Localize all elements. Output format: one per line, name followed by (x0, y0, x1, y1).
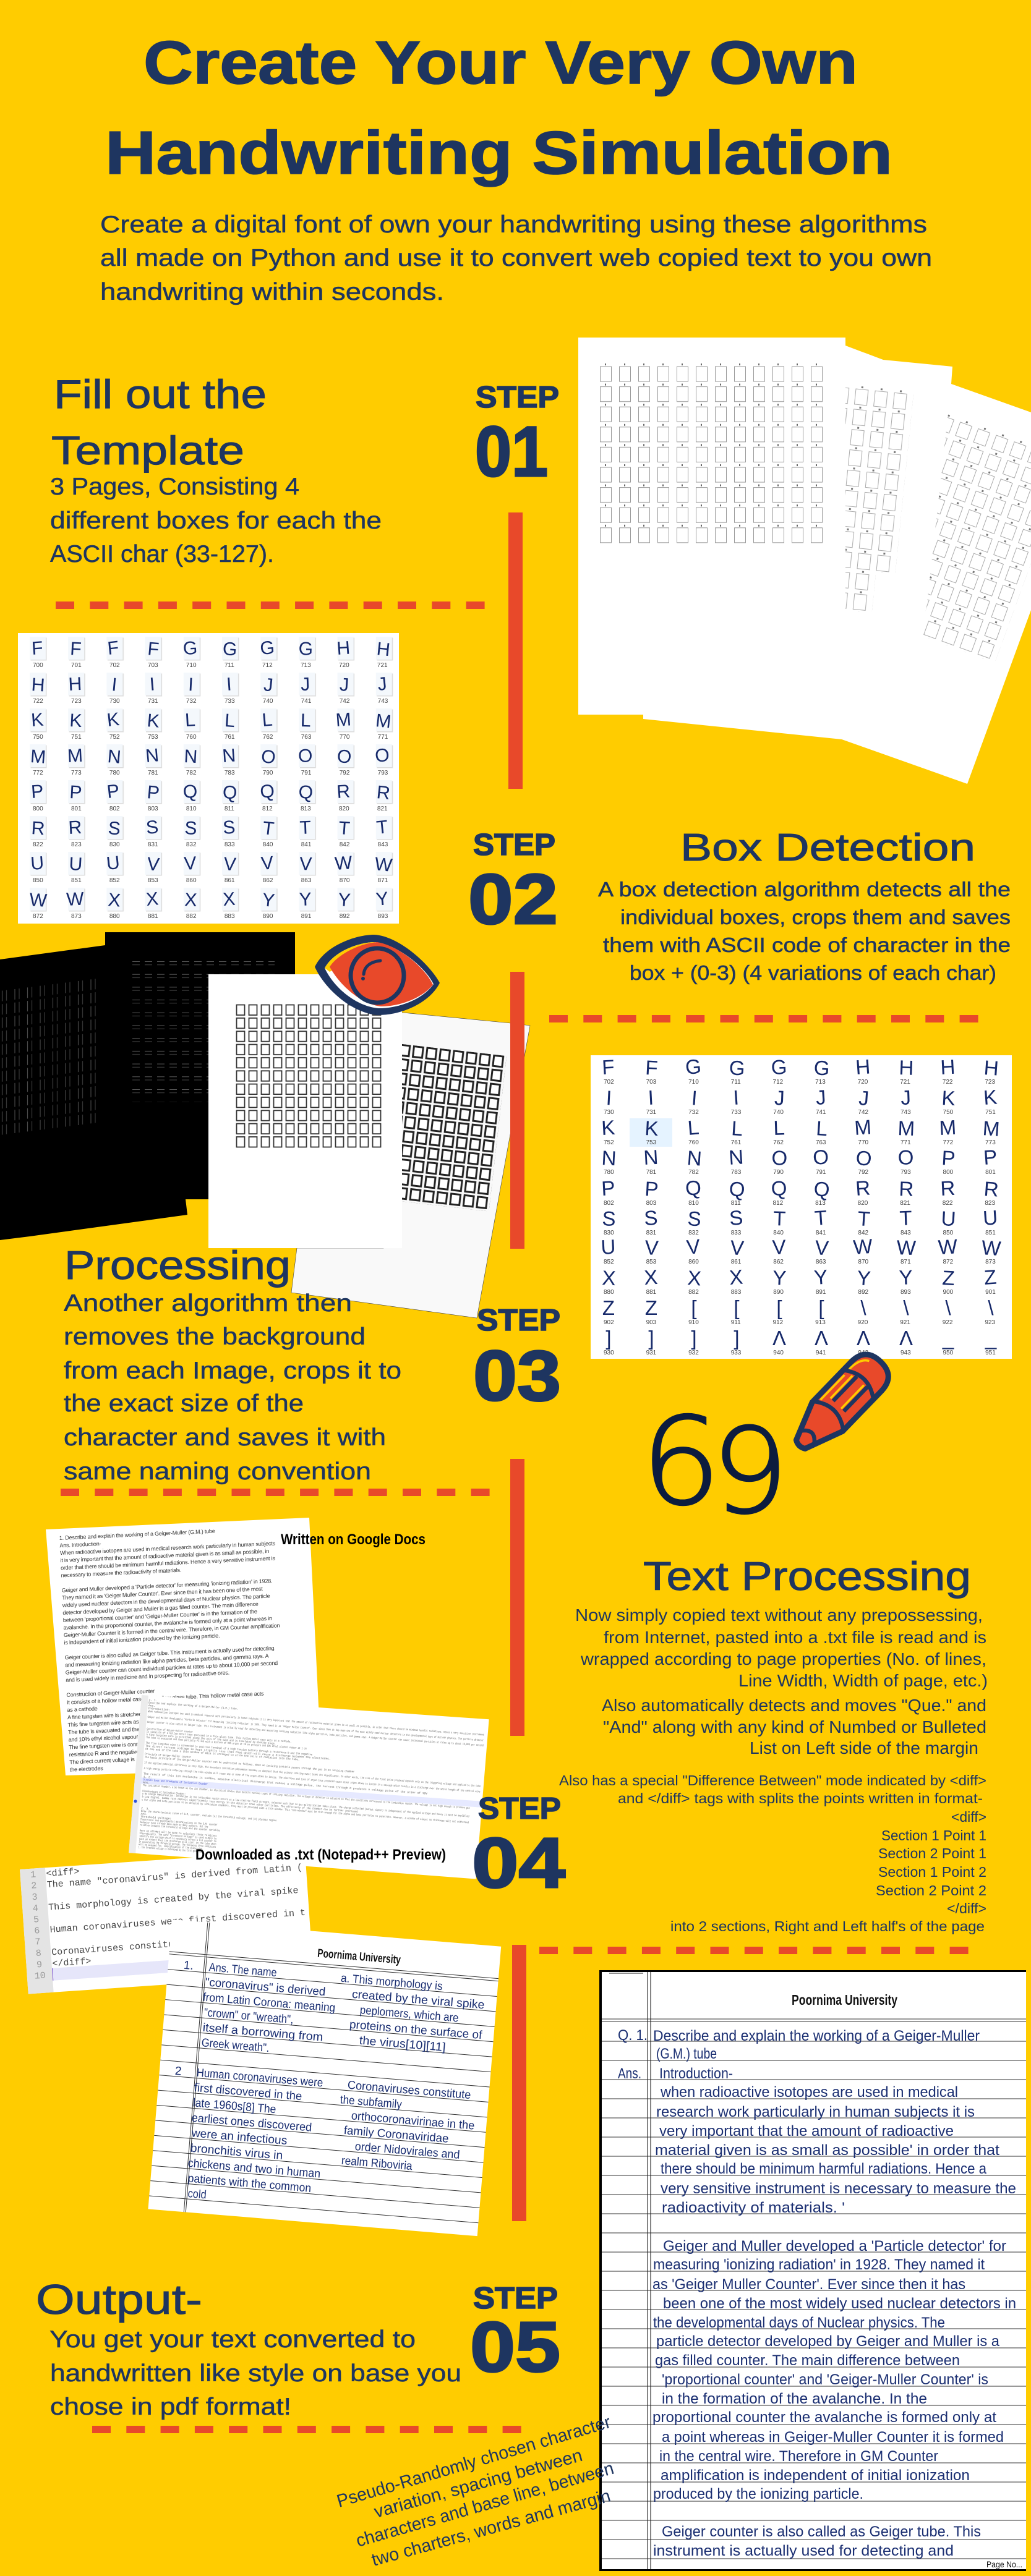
panel: cropped characters: 730 731 732 733 740 741 742 743 750 751 (604, 1109, 996, 1116)
handwriting lines: produced by the ionizing particle. (653, 2486, 863, 2502)
panel: google docs page: Geiger counter is also called as Geiger tube. This instrument is actually used for detecting (64, 1645, 275, 1660)
difference between description: </diff> (947, 1900, 986, 1916)
panel: filled template characters: 850 851 852 853 860 861 862 863 870 871 (33, 877, 388, 884)
step 03 badge: STEP (477, 1304, 560, 1337)
panel: two-column handwritten page (148, 1919, 501, 2236)
panel: two-column handwritten page: order Nidovirales and (354, 2140, 460, 2162)
heading: fill out the template: Template (51, 428, 244, 473)
processing description: the exact size of the (64, 1390, 304, 1417)
vertical bar 3 (510, 1459, 524, 1736)
panel: filled template characters: PPPPQQQQRR (30, 781, 391, 804)
panel: two-column handwritten page: proteins on the surface of (349, 2018, 483, 2042)
handwriting lines: a point whereas in Geiger-Muller Counter it is formed (662, 2429, 1004, 2446)
third page box grid (923, 414, 1031, 661)
panel: google docs page: The direct current voltage is (69, 1756, 135, 1766)
icon: eye (315, 935, 440, 1015)
panel: notepad++ page: When radioactive isotopes are used in medical research work particularly in human subjects it is very important that the amount of radioactive material given is as small as possible, in order that there should be minimum harmful radiations. Hence a very sensitive instrument (148, 1710, 484, 1737)
box detection description: A box detection algorithm detects all the (598, 878, 1011, 901)
panel: two-column handwritten page: a. This morphology is (340, 1972, 443, 1993)
panel: notepad preview: This morphology is created by the viral spike (48, 1885, 299, 1913)
box detection description: individual boxes, crops them and saves (620, 906, 1011, 929)
step 1 description: ASCII char (33-127). (50, 541, 274, 567)
rotated caption: pseudo-random variation: variation, spacing between (372, 2446, 584, 2522)
dashed divider 1 (56, 601, 486, 609)
text processing description: Now simply copied text without any prepossessing, (575, 1605, 983, 1625)
handwriting lines: Ans. (618, 2065, 641, 2082)
page number label: Page No... (986, 2559, 1022, 2569)
panel: notepad preview: 7 (35, 1937, 41, 1948)
output description: You get your text converted to (49, 2326, 416, 2353)
panel: cropped characters: IIIIJJJJKK (605, 1086, 998, 1110)
handwriting lines: there should be minimum harmful radiations. Hence a (661, 2161, 987, 2177)
handwriting lines: in the formation of the avalanche. In the (662, 2391, 927, 2407)
panel: notepad++ page: 1. 2. (143, 1775, 152, 1779)
difference between description: Section 2 Point 1 (878, 1845, 986, 1861)
panel: two-column handwritten page: peplomers, which are (359, 2004, 459, 2025)
panel: google docs page: A fine tungsten wire is stretched (67, 1711, 142, 1720)
panel: two-column handwritten page: created by the viral spike (351, 1988, 485, 2012)
processing description: from each Image, crops it to (64, 1358, 401, 1384)
rotated caption: pseudo-random variation: characters and base line, between (354, 2459, 616, 2551)
panel: google docs page: The tube is evacuated and then (68, 1726, 143, 1735)
step 04 badge: 04 (472, 1824, 565, 1903)
panel: notepad preview: 5 (33, 1915, 40, 1926)
panel: filled template characters: 700 701 702 703 710 711 712 713 720 721 (33, 662, 388, 669)
panel: notepad++ page: In calculating the threshold voltage, the following three conditions (139, 1840, 216, 1849)
panel: cropped characters: 902 903 910 911 912 913 920 921 922 923 (604, 1319, 995, 1326)
panel: notepad preview: 3 (32, 1892, 38, 1903)
intro text: all made on Python and use it to convert web copied text to you own (100, 245, 932, 271)
panel: notepad preview: 4 (32, 1903, 38, 1914)
panel: two-column handwritten page: from Latin Corona: meaning (202, 1991, 336, 2015)
handwriting lines: radioactivity of materials. ' (662, 2200, 845, 2216)
handwriting lines: research work particularly in human subjects it is (656, 2104, 975, 2120)
tilted page with boxes (291, 1011, 530, 1318)
panel: two-column handwritten page: 1. (183, 1959, 194, 1973)
panel: notepad++ page: Ans. (140, 1812, 148, 1816)
vertical bar 4 (512, 1945, 526, 2221)
panel: filled template characters: WWXXXXYYYY (28, 888, 390, 911)
step 01 badge (475, 381, 559, 491)
panel: google docs page: avalanche. In the proportional counter, the avalanche is formed only at a point whereas in (63, 1615, 272, 1631)
panel: two-column handwritten page: were an infectious (190, 2127, 288, 2148)
panel: notepad++ page: such an extent that the discharge will start in the tube when (139, 1837, 216, 1846)
panel: notepad++ page: Principle of Geiger-Muller counter (145, 1753, 192, 1759)
panel: google docs page: 1. Describe and explain the working of a Geiger-Muller (G.M.) tube (59, 1528, 215, 1541)
panel: cropped characters: ZZ[[[[\\\\ (602, 1296, 994, 1319)
panel: notepad++ page: The direct current voltage is kept slightly less than that which will cause a discharge between the electrodes. (145, 1745, 331, 1761)
panel: two-column handwritten page: orthocoronavirinae in the (351, 2109, 475, 2133)
panel: notepad++ page: Disadvantages of Ionization Chamber: (142, 1789, 186, 1796)
panel: two-column handwritten page: first discovered in the (194, 2081, 302, 2103)
panel: google docs page: widely used nuclear detectors in the developmental days of Nuclear physics. The particle (62, 1593, 270, 1609)
text processing description: Also automatically detects and moves "Que." and (602, 1696, 986, 1715)
panel: filled template characters: 872 873 880 881 882 883 890 891 892 893 (33, 913, 388, 920)
handwriting lines: the developmental days of Nuclear physics. The (653, 2315, 945, 2331)
rotated caption: pseudo-random variation: Pseudo-Randomly chosen character (335, 2412, 614, 2512)
difference between description: Also has a special "Difference Between" mode indicated by <diff> (559, 1772, 986, 1788)
handwriting lines: Geiger counter is also called as Geiger tube. This (662, 2523, 981, 2540)
text processing description (575, 1605, 988, 1758)
title: Create Your Very Own (143, 28, 858, 96)
panel: notepad preview: </diff> (52, 1957, 92, 1970)
panel: notepad++ page: Describe and explain the working of a Geiger-Muller (G.M.) tube. (148, 1701, 238, 1711)
handwriting lines: very sensitive instrument is necessary to measure the (661, 2180, 1016, 2197)
panel: filled template characters: 722 723 730 731 732 733 740 741 742 743 (33, 698, 388, 705)
panel: google docs page: Construction of Geiger-Muller counter (66, 1688, 155, 1698)
panel: notepad++ page: b Low Signal. Gamma rays deposit significantly less energy in the detector than other particles. The efficiency of the chamber can be further increased (142, 1795, 358, 1814)
panel: two-column handwritten page: the virus[10][11] (359, 2034, 446, 2054)
panel: notepad preview (20, 1850, 314, 1994)
text processing description: "And" along with any kind of Numbed or Bulleted (603, 1717, 986, 1736)
step 05 badge (470, 2282, 560, 2387)
panel: notepad++ page: The result of this ion avalanche is sudden, massive electrical discharge that cannot a voltage pulse. The current through R produces a voltage pulse of the order of 10V (143, 1772, 427, 1796)
panel: notepad preview: Coronaviruses constitute (51, 1939, 185, 1958)
handwriting lines: gas filled counter. The main difference between (655, 2352, 960, 2369)
step 02 badge: STEP (473, 828, 555, 862)
panel: two-column handwritten page: 2 (174, 2065, 182, 2078)
panel: notepad++ page: The fine tungsten wire is connected to positive terminal of a high tension battery through a resistance R and the negative (145, 1741, 312, 1756)
panel: cropped characters: UVVVVVWWWW (601, 1235, 1002, 1260)
step 02 badge (468, 828, 558, 939)
panel: notepad++ page: c For alpha and beta particles to be detected by ionization chambers, they must be provided with a thin window. This "end-window" must be thin enough for the alpha and beta particles to penetrate. However, a window of almost no thickness will not withstand (142, 1798, 469, 1824)
handwriting lines: particle detector developed by Geiger and Muller is a (656, 2333, 1000, 2350)
panel: google docs page: detector developed by Geiger and Muller is a gas filled counter. The main difference (62, 1601, 259, 1616)
panel: google docs page: and is used widely in medicine and in prospecting for radioactive ores. (66, 1670, 229, 1683)
panel: google docs page: it is very important that the amount of radioactive material given is as small as possible, in (60, 1548, 269, 1563)
black processed scans (0, 932, 295, 1240)
box detection description: them with ASCII code of character in the (603, 933, 1011, 956)
panel: notepad++ page: At one end of the tube a thin window of mica is arranged to allow the entry of radiation into the tube. (145, 1747, 300, 1762)
panel: notepad++ page: 2. 3. (141, 1806, 150, 1811)
panel: notepad preview: 2 (31, 1881, 37, 1892)
panel: notepad++ page: The tube is evacuated and then partially filled with a mixture of 90% argon at 10 cm pressure and 10% ethyl alcohol vapour at 1 cm (146, 1736, 307, 1751)
panel: cropped characters (591, 1055, 1012, 1359)
panel: filled template characters: 800 801 802 803 810 811 812 813 820 821 (33, 806, 388, 812)
heading: processing: Processing (64, 1243, 291, 1288)
panel: google docs page: necessary to measure the radioactivity of materials. (61, 1567, 181, 1578)
panel: cropped characters: 752 753 760 761 762 763 770 771 772 773 (604, 1139, 996, 1146)
panel: notepad++ page: Ans. (148, 1704, 155, 1708)
intro text: Create a digital font of own your handwriting using these algorithms (100, 211, 927, 238)
heading: fill out the template: Fill out the (54, 372, 267, 417)
handwriting lines: proportional counter the avalanche is formed only at (652, 2409, 996, 2426)
output description: handwritten like style on base you (50, 2360, 461, 2387)
panel: notepad preview: <diff> (46, 1866, 80, 1879)
panel: cropped characters: 930 931 932 933 940 941 942 943 950 951 (604, 1350, 996, 1356)
text processing description: wrapped according to page properties (No. of lines, (580, 1649, 986, 1668)
dashed divider 4 (539, 1947, 970, 1954)
panel: notepad preview: Human coronaviruses were first discovered in t (49, 1908, 306, 1936)
panel: two-column handwritten page: "coronavirus" is derived (205, 1976, 326, 1999)
handwriting lines: very important that the amount of radioactive (659, 2123, 954, 2140)
step 01 badge: STEP (476, 381, 559, 414)
panel: filled template characters: 750 751 752 753 760 761 762 763 770 771 (33, 734, 388, 741)
panel: cropped characters: FFGGGGHHHH (601, 1055, 999, 1080)
difference between description: Section 1 Point 1 (881, 1827, 986, 1843)
panel: google docs page: between 'proportional counter' and 'Geiger-Muller Counter' is in the formation of the (63, 1609, 257, 1623)
panel: notepad++ page: Here an attempt will be made to calculate those relations (139, 1829, 217, 1838)
panel: notepad++ page: behavior have already been made by many authors. But the (140, 1821, 208, 1829)
panel: notepad++ page: theoretically. The word "threshold voltage" is used simply to (139, 1832, 216, 1841)
panel: notepad preview: 6 (34, 1926, 40, 1937)
panel: two-column handwritten page: Ans. The name (208, 1961, 277, 1979)
panel: two-column handwritten page: the subfamily (340, 2093, 403, 2111)
panel: filled template characters: 772 773 780 781 782 783 790 791 792 793 (33, 770, 388, 776)
handwriting lines: (G.M.) tube (656, 2046, 717, 2062)
second page box grid (845, 386, 913, 612)
panel: google docs page: resistance R and the negative (69, 1748, 139, 1758)
panel: google docs page: order that there should be minimum harmful radiations. Hence a very sensitive instrument is (61, 1555, 276, 1571)
text processing description: Line Width, Width of page, etc.) (738, 1671, 988, 1690)
step 01 badge: 01 (475, 412, 548, 491)
handwritten sample 69 (641, 1392, 789, 1540)
panel: google docs page: The fine tungsten wire is connected (69, 1740, 152, 1750)
processing description: Another algorithm then (64, 1290, 352, 1317)
output description: chose in pdf format! (50, 2394, 291, 2420)
panel: notepad++ page: Draw the characteristic curve of G.M. counter, explain (a) the threshold voltage, and (b) plateau region (141, 1809, 277, 1822)
panel: notepad++ page (129, 1695, 489, 1879)
intro text: handwriting within seconds. (100, 279, 444, 305)
panel: notepad++ page: A fine tungsten wire is stretched along the axis of the tube and is insulated by ebonite plugs. (146, 1733, 276, 1746)
dashed divider 3 (61, 1489, 490, 1496)
handwriting lines: 'proportional counter' and 'Geiger-Muller Counter' is (662, 2371, 988, 2388)
panel: cropped characters: 780 781 782 783 790 791 792 793 800 801 (604, 1169, 996, 1176)
vertical bar 2 (510, 972, 524, 1249)
panel: google docs page: and measuring ionizing radiation like alpha particles, beta particles, and gamma rays. A (65, 1653, 269, 1668)
panel: cropped characters: 702 703 710 711 712 713 720 721 722 723 (604, 1079, 995, 1086)
handwriting lines: Geiger and Muller developed a 'Particle detector' for (663, 2238, 1006, 2255)
processing description: same naming convention (64, 1458, 371, 1485)
panel: filled template characters: UUUVVVVVWW (30, 852, 393, 876)
difference between description: and </diff> tags with splits the points written in format- (618, 1790, 983, 1806)
handwriting lines: when radioactive isotopes are used in medical (660, 2084, 958, 2101)
panel: google docs page: as a cathode (67, 1706, 98, 1713)
white page with box grid (208, 974, 402, 1248)
output description (49, 2326, 461, 2420)
panel: two-column handwritten page: late 1960s[8] The (192, 2096, 276, 2116)
panel: google docs page: It consists of a hollow metal case or a hollow glass tube. This hollow metal case acts (67, 1690, 264, 1706)
panel: cropped characters: PPQQQQRRRR (601, 1176, 999, 1201)
text processing description: List on Left side of the margin (750, 1738, 978, 1758)
panel: notepad++ page: Ans. (143, 1781, 150, 1785)
panel: google docs page: Geiger-Muller counter can count individual particles at rates up to about 10,000 per second (66, 1660, 278, 1676)
step 04 badge (472, 1792, 565, 1903)
step 05 badge: STEP (473, 2282, 558, 2315)
panel: filled template characters: 822 823 830 831 832 833 840 841 842 843 (33, 841, 388, 848)
processing description (64, 1290, 401, 1485)
template pages (578, 338, 1031, 784)
title (105, 28, 892, 187)
panel: google docs page: This fine tungsten wire acts as (67, 1719, 139, 1728)
panel: notepad++ page: Threshold Voltage: (140, 1815, 171, 1821)
step 1 description: different boxes for each the (50, 508, 382, 534)
panel: two-column handwritten page: itself a borrowing from (202, 2021, 323, 2044)
panel: two-column handwritten page: chickens and two in human (187, 2157, 321, 2181)
dashed divider 5 (92, 2426, 523, 2433)
panel: google docs page: the electrodes (70, 1765, 103, 1773)
panel: two-column handwritten page: earliest ones discovered (191, 2112, 312, 2135)
heading: fill out the template (51, 372, 267, 473)
panel: notepad++ page: A high energy particle entering through the thin window will cause one or more of the argon atoms to ionize. The electrons and ions of argon thus produced cause other argon atoms to ionize in a cascade which results in a discharge over the whole length of the central wire (144, 1767, 481, 1794)
difference between description: <diff> (951, 1809, 986, 1825)
step 1 description (50, 474, 382, 567)
panel: two-column handwritten page: "crown" or "wreath", (203, 2006, 294, 2026)
panel: cropped characters: 802 803 810 811 812 813 820 821 822 823 (604, 1200, 995, 1207)
difference between description: into 2 sections, Right and Left half's of the page (670, 1918, 985, 1934)
handwriting lines: in the central wire. Therefore in GM Counter (659, 2448, 938, 2465)
panel: filled template characters (18, 633, 399, 924)
label: downloaded as txt: Downloaded as .txt (Notepad++ Preview) (195, 1847, 446, 1863)
panel: notepad preview: 10 (34, 1971, 46, 1982)
panel: notepad++ page: Construction of Geiger-Muller counter (147, 1727, 193, 1734)
panel: notepad++ page: It consists of a hollow metal case enclosed in a thin glass tube. This hollow metal case acts as a cathode. (147, 1730, 292, 1744)
vertical bar 1 (508, 512, 523, 789)
panel: two-column handwritten page: cold (187, 2187, 207, 2202)
first page box grid (600, 363, 830, 544)
processing description: character and saves it with (64, 1424, 386, 1451)
panel: cropped characters: SSSSTTTTUU (602, 1205, 998, 1231)
rotated caption: pseudo-random variation: two charters, words and margin (369, 2486, 613, 2570)
panel: cropped characters: 852 853 860 861 862 863 870 871 872 873 (604, 1259, 996, 1265)
panel: notepad++ page: Discuss Uses and Drawbacks of Ionization Chamber (143, 1778, 208, 1786)
panel: notepad preview: The name "coronavirus" is derived from Latin ( (46, 1863, 303, 1890)
panel: cropped characters: ]]]]ΛΛΛΛ__ (605, 1327, 997, 1350)
panel: two-column handwritten page: bronchitis virus in (190, 2142, 283, 2162)
handwritten sample 69: 9 (711, 1403, 789, 1540)
handwriting lines: amplification is independent of initial ionization (661, 2467, 970, 2484)
box detection description: box + (0-3) (4 variations of each char) (630, 961, 996, 984)
panel: cropped characters: NNNNOOOOPP (601, 1145, 998, 1170)
handwriting lines (618, 2027, 1016, 2559)
handwritten sample 69: 6 (641, 1392, 721, 1532)
heading: output: Output- (36, 2276, 202, 2323)
icon: pencil (784, 1347, 896, 1460)
panel: final handwritten page (599, 1970, 1026, 2571)
processing description: removes the background (64, 1324, 366, 1350)
panel: notepad++ page: identify the voltage which is necessary across a G-M counter to (139, 1834, 216, 1843)
panel: notepad++ page: will be assumed for, simplification of the discussion. (139, 1843, 203, 1851)
panel: two-column handwritten page: patients with the common (187, 2172, 312, 2195)
text processing description: from Internet, pasted into a .txt file is read and is (604, 1628, 986, 1647)
panel: two-column handwritten page: Coronaviruses constitute (347, 2079, 471, 2102)
panel: notepad preview: 1 (30, 1869, 36, 1881)
panel: google docs page: Geiger-Muller Counter it is formed in the central wire. Therefore, in GM Counter amplification (64, 1622, 280, 1638)
step 03 badge (473, 1304, 561, 1416)
panel: cropped characters: XXXXYYYYZZ (602, 1265, 998, 1290)
panel: filled template characters: FFFFGGGGHH (31, 637, 391, 660)
handwriting lines: Q. 1. (618, 2027, 648, 2044)
panel: notepad++ page: The ionization chamber, also known as the ion chamber, is electrical device that detects various types of ionizing radiation. The voltage of detector is adjusted so that the conditions correspond to the ionization region. The voltage is not high enough to produce gas (143, 1783, 470, 1810)
step 03 badge: 03 (473, 1337, 561, 1416)
step 05 badge: 05 (470, 2308, 560, 2387)
handwriting lines: Introduction- (659, 2065, 733, 2082)
panel: google docs page: and 10% ethyl alcohol vapour (68, 1733, 138, 1743)
panel: notepad++ page: relation between the threshold voltage and the counter variables (140, 1823, 220, 1832)
panel: filled template characters: MMNNNNOOOO (30, 745, 390, 768)
panel: notepad++ page: a No Charge Amplification: Ionization in the ionization region occurs at a low electric field strength, selected such that no gas multiplication takes place. The charge collected (output signal) is independent of the applied voltage and hence it must be amplified (142, 1792, 469, 1818)
panel: notepad++ page: If the applied potential difference is very high, the secondary ionization phenomenon becomes so dominant that the primary ionizing event loses its significance. In other words, the size of the final pulse produced depends only on the triggering voltage and applied to the tube (144, 1761, 481, 1788)
panel: filled template characters: HHIIIIJJJJ (31, 674, 388, 696)
panel: notepad++ page: Geiger and Muller developed a 'Particle detector' for measuring 'ionizing radiation' in 1928. They named it as 'Geiger Muller Counter'. Ever since then it has been one of the most widely used nuclear detectors in the developmental days of Nuclear physics. The particle detector (147, 1715, 484, 1743)
panel: filled template characters: RRSSSSTTTT (31, 817, 389, 840)
page heading: Poornima University (792, 1992, 897, 2008)
panel: google docs page (46, 1518, 322, 1775)
heading: box detection: Box Detection (680, 827, 975, 869)
panel: notepad++ page: The basic principle of the Geiger-Muller counter can be understood as follows. When an ionizing particle passes through the gas in an ionizing chamber (145, 1756, 355, 1774)
step 1 description: 3 Pages, Consisting 4 (50, 474, 299, 500)
panel: notepad++ page: 1. The threshold voltage is determined by the first generation (139, 1845, 203, 1854)
panel: notepad++ page: Theoretical and experimental determinations on the G.M. counter (140, 1817, 218, 1827)
handwriting lines: measuring 'ionizing radiation' in 1928. They named it (653, 2256, 985, 2273)
title: Handwriting Simulation (105, 119, 892, 187)
panel: google docs page: Geiger and Muller developed a 'Particle detector' for measuring 'ionizing radiation' in 1928. (61, 1578, 273, 1594)
difference between description: Section 1 Point 2 (878, 1864, 986, 1880)
panel: two-column handwritten page: realm Riboviria (341, 2154, 413, 2173)
handwriting lines: material given is as small as possible' in order that (655, 2142, 999, 2159)
panel: google docs page: When radioactive isotopes are used in medical research work particularly in human subjects (60, 1540, 276, 1556)
panel: notepad preview: 9 (36, 1960, 43, 1970)
dashed divider 2 (549, 1015, 980, 1022)
handwriting lines: Describe and explain the working of a Geiger-Muller (653, 2028, 980, 2044)
step 04 badge: STEP (478, 1792, 561, 1826)
panel: two-column handwritten page: Greek wreath". (201, 2036, 270, 2055)
panel: two-column handwritten page: family Coronaviridae (343, 2124, 449, 2146)
difference between description (559, 1772, 986, 1934)
handwriting lines: been one of the most widely used nuclear detectors in (663, 2295, 1016, 2312)
panel: notepad++ page: Introduction- (148, 1707, 170, 1712)
panel: notepad preview: 8 (35, 1948, 41, 1959)
box detection description (598, 878, 1011, 984)
label: written on google docs: Written on Google Docs (281, 1531, 426, 1548)
handwriting lines: instrument is actually used for detecting and (653, 2543, 954, 2559)
intro text (100, 211, 932, 305)
difference between description: Section 2 Point 2 (876, 1882, 986, 1898)
panel: cropped characters: 880 881 882 883 890 891 892 893 900 901 (604, 1289, 996, 1296)
heading: text processing: Text Processing (643, 1554, 971, 1599)
panel: filled template characters: KKKKLLLLMM (30, 709, 392, 733)
panel: notepad++ page: Geiger counter is also called as Geiger tube. This instrument is actually used for detecting and measuring ionizing radiation like alpha particles, beta particles, and gamma rays. A Geiger-Muller counter can count individual particles at rates up to about 10,000 per second (147, 1720, 484, 1748)
panel: google docs page: is independent of initial ionization produced by the ionizing particle. (64, 1633, 220, 1646)
rotated caption: pseudo-random variation (335, 2412, 616, 2570)
panel: two-column handwritten page: Human coronaviruses were (196, 2067, 323, 2089)
panel: cropped characters: KKLLLLMMMM (601, 1115, 1001, 1141)
panel: notepad++ page: 1. 1. (148, 1698, 157, 1702)
panel: google docs page: Ans. Introduction- (59, 1541, 101, 1549)
panel: google docs page: They named it as 'Geiger Muller Counter'. Ever since then it has been one of the most (62, 1586, 263, 1601)
step 02 badge: 02 (468, 860, 558, 939)
panel: cropped characters: 830 831 832 833 840 841 842 843 850 851 (604, 1230, 996, 1236)
handwriting lines: as 'Geiger Muller Counter'. Ever since then it has (652, 2276, 965, 2293)
panel: two-column handwritten page: Poornima University (317, 1947, 401, 1967)
